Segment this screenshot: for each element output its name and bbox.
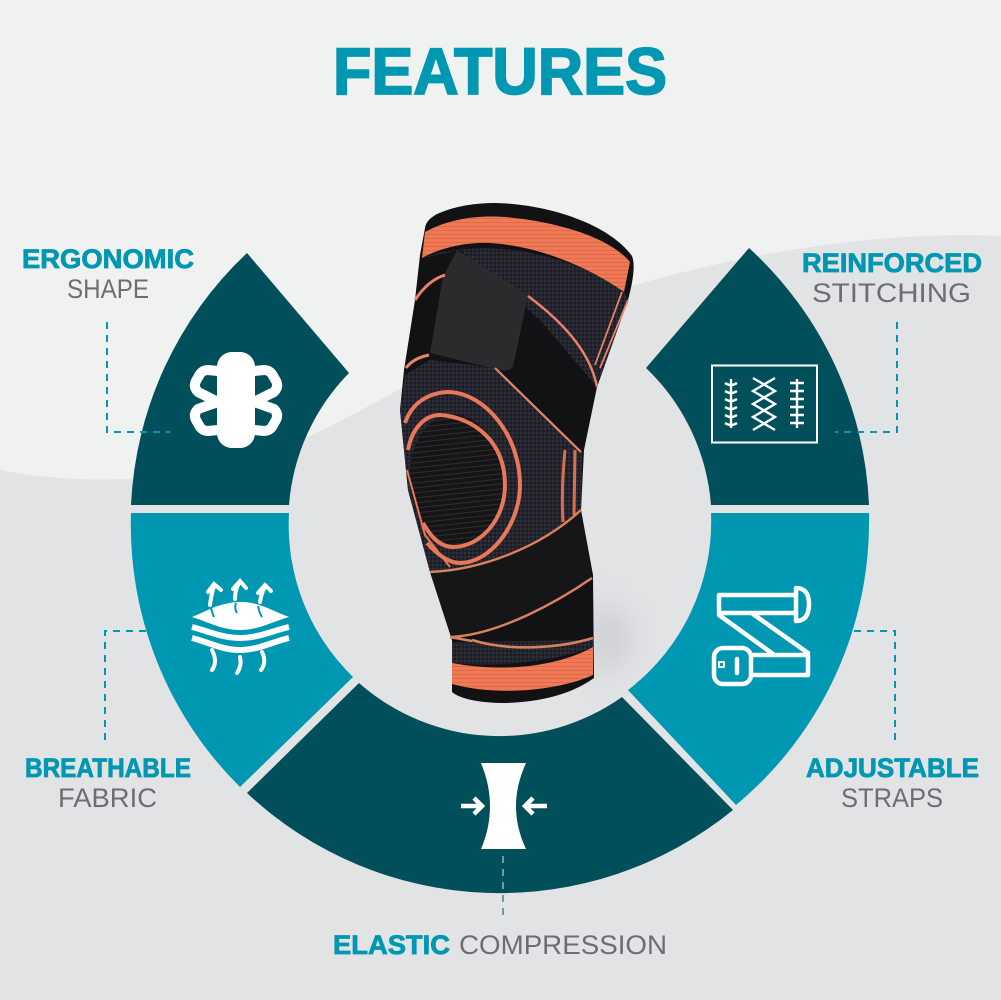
label: elastic compression (333, 930, 667, 960)
upper mesh panel (422, 248, 628, 387)
sleeve silhouette (400, 203, 634, 703)
icon: reinforced stitching (712, 366, 817, 442)
label: ergonomic shape (22, 244, 194, 304)
segment: elastic compression (247, 683, 733, 893)
inner kneecap ribbing (403, 409, 511, 551)
velcro tab (430, 250, 528, 371)
label: adjustable straps: STRAPS (841, 783, 943, 813)
lower strap (430, 510, 592, 640)
segment: breathable fabric (131, 513, 353, 787)
feature ring (131, 248, 869, 893)
label: reinforced stitching (802, 248, 982, 308)
connector: breathable (105, 631, 148, 740)
label: breathable fabric (25, 753, 191, 813)
connector: elastic (502, 856, 504, 916)
sleeve shadow (590, 600, 632, 678)
upper orange band (422, 216, 630, 292)
connector: adjustable (852, 631, 895, 740)
icon: adjustable straps (714, 588, 809, 684)
title: FEATURES (333, 34, 667, 108)
connector: reinforced (835, 322, 897, 432)
label: reinforced stitching: REINFORCED (802, 248, 982, 278)
segment: reinforced stitching (646, 248, 869, 505)
lower orange band (452, 647, 593, 691)
lower strap lines (430, 510, 593, 647)
label: adjustable straps (806, 753, 979, 813)
label: breathable fabric: BREATHABLE (25, 753, 191, 783)
segment: adjustable straps (628, 513, 869, 805)
knee mesh panel (400, 360, 582, 572)
lower mesh panel (452, 640, 593, 665)
label: adjustable straps: ADJUSTABLE (806, 753, 979, 783)
icon: ergonomic shape (195, 352, 277, 448)
label: ergonomic shape: SHAPE (67, 274, 149, 304)
label: elastic compression: COMPRESSION (459, 930, 667, 960)
label: reinforced stitching: STITCHING (812, 278, 971, 308)
segment: ergonomic shape (131, 253, 349, 505)
icon: elastic compression (461, 763, 547, 849)
icon: breathable fabric (192, 581, 289, 673)
knee sleeve product (400, 203, 634, 703)
connector: ergonomic (107, 322, 170, 432)
kneecap rings (405, 392, 520, 567)
label: breathable fabric: FABRIC (58, 783, 157, 813)
upper wrap strap lines (406, 275, 628, 522)
label: ergonomic shape: ERGONOMIC (22, 244, 194, 274)
label: elastic compression: ELASTIC (333, 930, 450, 960)
